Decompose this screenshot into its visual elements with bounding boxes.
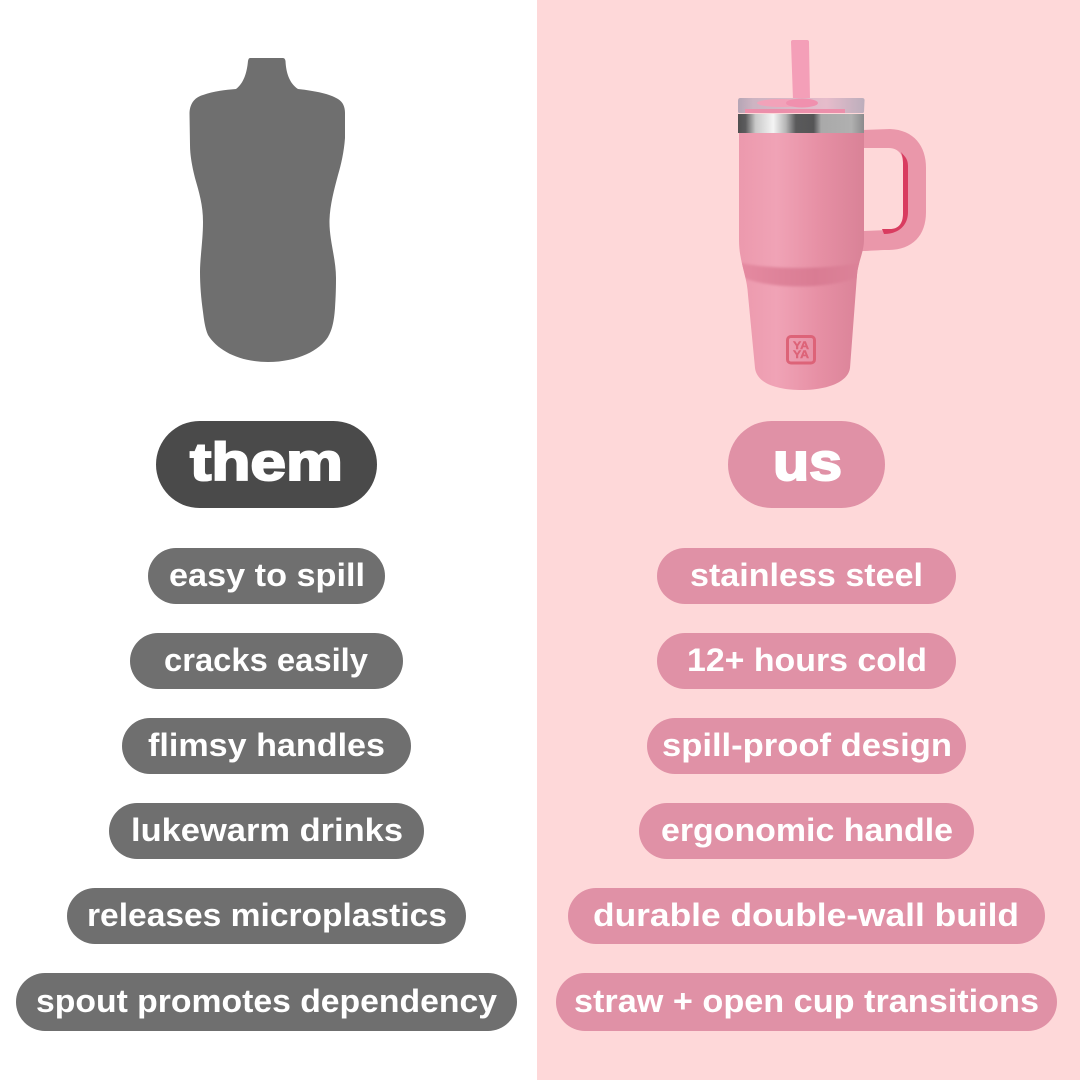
- pill: 12+ hours cold: [657, 633, 956, 689]
- pill: flimsy handles: [122, 718, 411, 774]
- pill: releases microplastics: releases microplastics: [87, 897, 447, 933]
- pill: 12+ hours cold: 12+ hours cold: [687, 642, 927, 678]
- pill: lukewarm drinks: [109, 803, 424, 859]
- panel: us background: [537, 0, 1080, 1080]
- pill: easy to spill: easy to spill: [169, 557, 365, 593]
- pill: straw + open cup transitions: straw + open cup transitions: [574, 983, 1039, 1019]
- handle inner shadow: [882, 152, 908, 234]
- clear lid: [738, 98, 865, 113]
- pill: spill-proof design: spill-proof design: [662, 727, 952, 763]
- logo: YAYA: YA: [793, 349, 809, 361]
- pill: durable double-wall build: durable double-wall build: [593, 897, 1019, 933]
- pill: stainless steel: stainless steel: [690, 557, 923, 593]
- heading: them: [156, 421, 377, 508]
- pill: stainless steel: [657, 548, 956, 604]
- heading: us: [728, 421, 885, 508]
- logo: YAYA: YA: [793, 340, 809, 352]
- pill: flimsy handles: flimsy handles: [148, 727, 385, 763]
- pill: lukewarm drinks: lukewarm drinks: [131, 812, 403, 848]
- handle: [862, 129, 926, 251]
- pill: cracks easily: cracks easily: [164, 642, 368, 678]
- logo: YAYA: [788, 336, 814, 363]
- heading: them: them: [190, 433, 343, 492]
- panel: them background: [0, 0, 537, 1080]
- cup body: [739, 132, 864, 390]
- pill: ergonomic handle: [639, 803, 974, 859]
- icon: pink YAYA tumbler with straw and handle: [738, 40, 926, 390]
- pill: spill-proof design: [647, 718, 966, 774]
- pill: cracks easily: [130, 633, 403, 689]
- pill: durable double-wall build: [568, 888, 1045, 944]
- pill: releases microplastics: [67, 888, 466, 944]
- pill: ergonomic handle: ergonomic handle: [661, 812, 953, 848]
- pill: easy to spill: [148, 548, 385, 604]
- steel rim: [738, 114, 864, 133]
- straw: [791, 40, 810, 100]
- body taper band: [742, 262, 860, 287]
- heading: us: us: [773, 433, 842, 492]
- pill: spout promotes dependency: spout promotes dependency: [36, 983, 497, 1019]
- icon: generic sippy cup silhouette: [190, 58, 345, 362]
- pill: straw + open cup transitions: [556, 973, 1057, 1031]
- pill: spout promotes dependency: [16, 973, 517, 1031]
